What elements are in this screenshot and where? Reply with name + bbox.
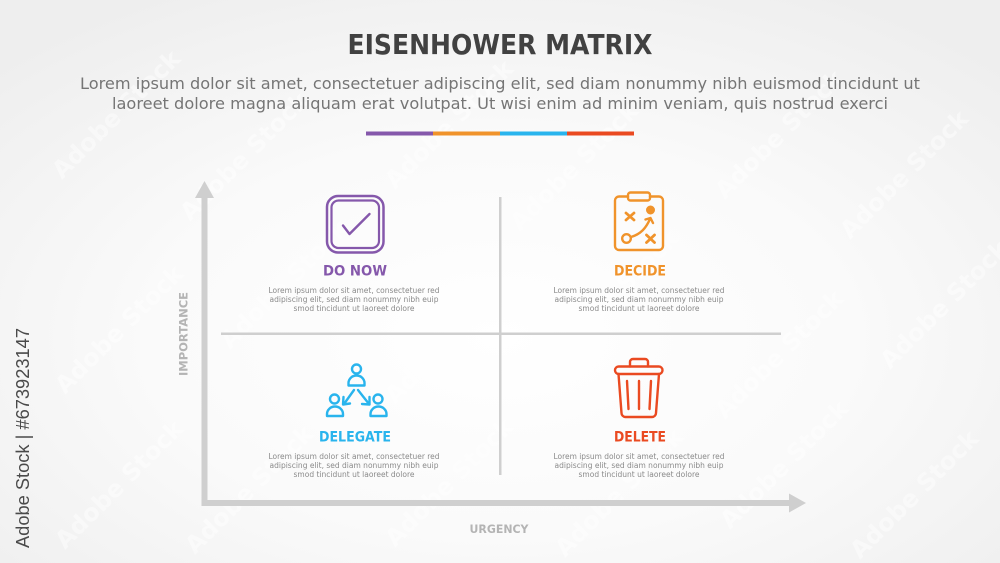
text: do now body <box>268 286 440 313</box>
horizontal axis arrow: urgency <box>202 494 806 512</box>
text: Adobe Stock <box>714 394 855 534</box>
text: decide body: smod tincidunt ut laoreet dolore <box>578 304 700 313</box>
colour divider bar <box>366 132 634 136</box>
panel: delete <box>554 359 724 479</box>
text: Adobe Stock <box>549 422 690 562</box>
text: delegate body: adipiscing elit, sed diam nonummy nibh euip <box>270 461 438 470</box>
text: delete body: adipiscing elit, sed diam nonummy nibh euip <box>554 461 724 470</box>
text: Adobe Stock <box>709 64 850 204</box>
text: Adobe Stock <box>49 414 190 554</box>
icon: trash bin <box>615 359 662 417</box>
heading: decide: DECIDE <box>614 264 666 280</box>
text: delegate body: Lorem ipsum dolor sit amet, consectetuer red <box>268 452 440 461</box>
text: Adobe Stock <box>46 44 187 184</box>
text: Adobe Stock <box>504 96 645 236</box>
text: decide body: adipiscing elit, sed diam nonummy nibh euip <box>554 295 724 304</box>
intro paragraph: laoreet dolore magna aliquam erat volutpat. Ut wisi enim ad minim veniam, quis nostrud exerci <box>112 94 888 113</box>
text: Adobe Stock <box>834 104 975 244</box>
text: Adobe Stock <box>379 269 520 409</box>
intro paragraph <box>80 74 920 113</box>
text: Adobe Stock <box>379 412 520 552</box>
text: Adobe Stock <box>179 419 320 559</box>
text: do now body: smod tincidunt ut laoreet dolore <box>294 304 415 313</box>
text: delete body: smod tincidunt ut laoreet dolore <box>578 470 700 479</box>
icon: clipboard with play diagram <box>615 192 663 250</box>
text: decide body: Lorem ipsum dolor sit amet, consectetuer red <box>554 286 724 295</box>
text: Adobe Stock <box>214 214 355 354</box>
text: Adobe Stock <box>844 424 985 563</box>
vertical axis arrow: importance <box>195 181 214 506</box>
axis label: importance: IMPORTANCE <box>176 292 190 376</box>
panel: do now <box>268 196 440 313</box>
text: do now body: adipiscing elit, sed diam nonummy nibh euip <box>270 295 438 304</box>
title: EISENHOWER MATRIX <box>348 29 652 61</box>
heading: do now: DO NOW <box>323 264 387 280</box>
icon: checkbox <box>327 196 384 252</box>
text: Adobe Stock <box>49 259 190 399</box>
heading: delete: DELETE <box>614 430 666 446</box>
watermark id: adobe stock: Adobe Stock | #673923147 <box>13 328 33 548</box>
text: Adobe Stock <box>709 284 850 424</box>
panel: decide <box>554 192 724 313</box>
text: Adobe Stock <box>544 224 685 364</box>
text: delegate body <box>268 452 440 479</box>
text: delegate body: smod tincidunt ut laoreet dolore <box>294 470 415 479</box>
text: decide body <box>554 286 724 313</box>
panel: delegate <box>268 364 440 479</box>
intro paragraph: Lorem ipsum dolor sit amet, consectetuer adipiscing elit, sed diam nonummy nibh euismod tincidunt ut <box>80 74 920 93</box>
text: Adobe Stock <box>174 86 315 226</box>
heading: delegate: DELEGATE <box>319 430 391 446</box>
text: do now body: Lorem ipsum dolor sit amet, consectetuer red <box>268 286 440 295</box>
quadrant divider lines <box>221 197 781 475</box>
text: delete body: Lorem ipsum dolor sit amet, consectetuer red <box>554 452 724 461</box>
axis label: urgency: URGENCY <box>470 522 529 536</box>
icon: people with arrows <box>327 364 386 416</box>
text: Adobe Stock <box>379 54 520 194</box>
text: delete body <box>554 452 724 479</box>
